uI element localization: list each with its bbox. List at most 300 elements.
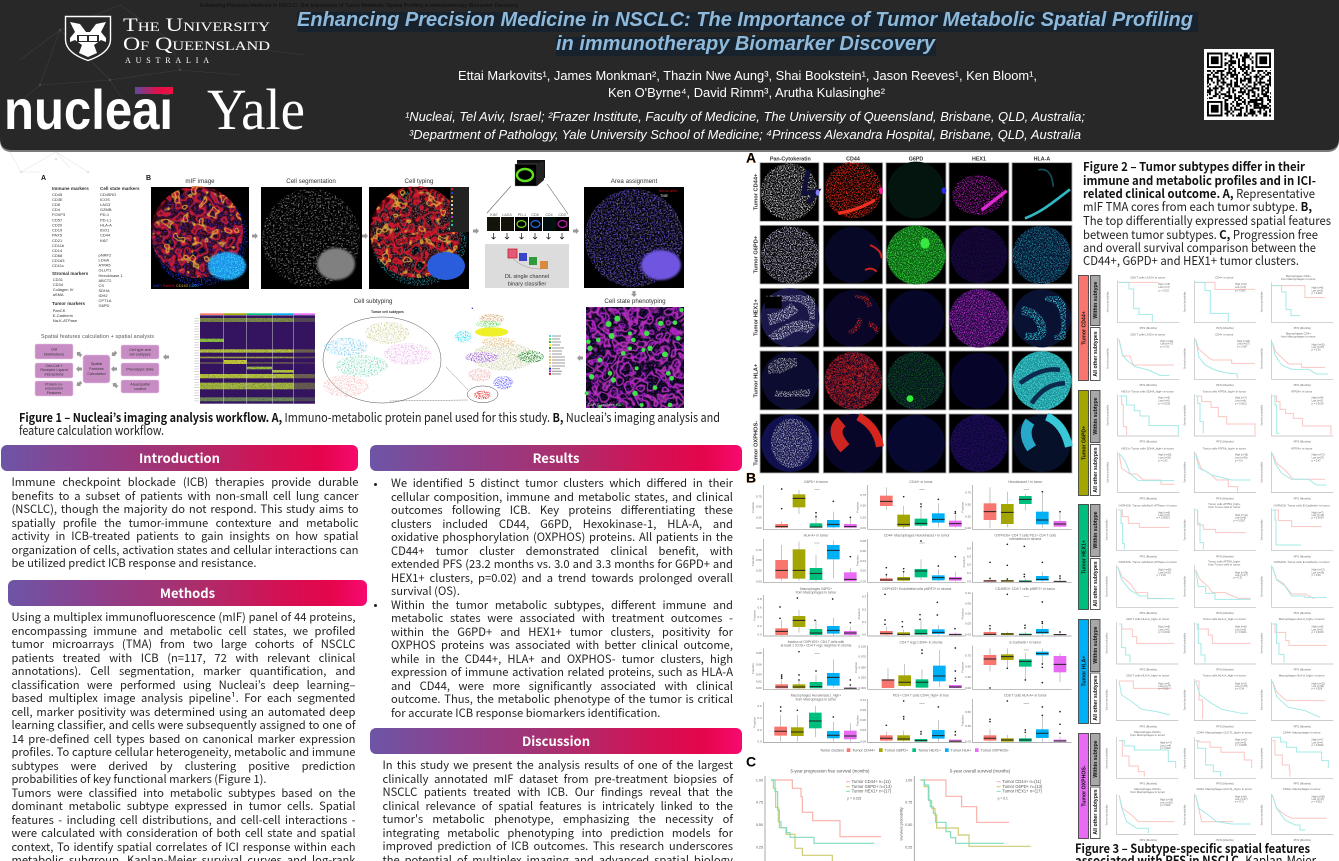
text: results: while in the CD44+, HLA+ and OXPHOS- tumor clusters, high [391,650,733,666]
km row 4: PFS (Months) [1216,497,1234,501]
text: methods: patients treated with ICB (n=117, 72 with relevant clinical [12,650,356,666]
figure 1 panel A: protein panel [41,175,140,323]
title: Enhancing Precision Medicine in NSCLC: The Importance of Tumor Metabolic Spatial Profiling [297,8,1193,31]
OS chart: 0.50 [905,823,912,827]
box: fraction of OXPHOS+ CD4 T cells: 0.08 [756,651,762,655]
figure 2 caption: between tumor subtypes. C, Progression free [1083,226,1318,243]
box: PD1+ CD4 T cells CD44 high: 0.00 [860,739,866,743]
box: OXPHOS+ CD4 T cell interactions: 0.2 [967,563,971,567]
km row 1: High (n=8) [1235,283,1247,286]
km row 7: Low (n=5) [1235,628,1246,631]
box: PD1+ CD4 T cells CD44 high: 0.12 [860,698,866,702]
figure 1 panel A: protein panel: CD19 [52,228,63,232]
km row 9: High (n=7) [1312,739,1323,742]
box: Hexokinase1+ in tumor: Fraction [960,502,964,513]
km row 2: Macrophages CD4+ [1286,332,1311,336]
box: fraction of OXPHOS+ CD4 T cells: 0.00 [756,686,762,690]
spatial features calculation diagram [35,334,169,396]
mIF image: DAPI PanCK CD163 CD20 [153,284,199,288]
km row 4: p = 0.6 [1235,459,1243,462]
km row 9: Low (n=5) [1235,741,1246,744]
km row 9: Macrophages CD44+ [1134,730,1161,734]
km row 2: Low (n=37) [1237,343,1250,346]
km row 4: ATP5A+ in tumor [1291,446,1312,450]
box: macrophages G6PD+: 0.4 [758,615,762,619]
text: results: for accurate ICB response biomarkers identification. [391,704,660,720]
km row 9: PFS (Months) [1140,781,1157,785]
spatial features calculation diagram: Receptor-Ligand [40,368,68,372]
km row 10: p = 0.71 [1235,801,1245,804]
km row 4: HEX1+ Tumor cells SDHA_high+ in tumor [1121,446,1174,450]
text: results: metabolic states were associated with treatment outcomes - [391,610,733,626]
km row 3: Survival probability [1183,404,1186,426]
cell subtyping title: Cell subtyping [354,298,393,305]
km row 4: PFS (Months) [1140,497,1157,501]
figure 2 panel A: tumor subtype TMA cores: HEX1 [972,156,986,162]
box: CD4 T regs CD44+: 0.025 [859,675,866,679]
text: methods: tumor microarrays (TMA) from two large cohorts of NSCLC [12,636,356,652]
km row 5: PFS (Months) [1140,554,1157,558]
spatial features calculation diagram: Features [89,367,104,371]
figure 1 panel A: protein panel: IDH2 [98,293,108,298]
heading: introduction [1,445,358,471]
box: CD45RO+ CD8: 0.09 [965,602,971,606]
box: Hexokinase1+ in tumor: 0.00 [965,526,971,530]
km row 5: High (n=7) [1312,511,1323,514]
km row 3: Low (n=6) [1235,399,1246,402]
bullet marker [374,483,376,486]
figure 1 panel A: protein panel: pNRF2 [98,252,112,258]
box plot legend: Tumor G6PD+ [885,748,908,752]
text: discussion: NSCLC patients treated with ICB. Our findings reveal that the [382,784,733,800]
km row 3: ATP5A+ in tumor [1291,389,1312,393]
km row 9: p = 0.009 [1160,747,1171,750]
box: CD4 T regs CD44+: Fraction [854,662,858,673]
figure 3 subtype labels: All other subtypes [1093,789,1099,835]
box: CD44+ in tumor: CD44+ in tumor [909,480,934,484]
box: HLA-A+ in tumor: 0.25 [756,568,762,572]
figure 1 panel A: protein panel: GLUT1 [98,268,112,273]
box: G6PD+ in tumor [751,480,860,530]
km row 5 [1106,502,1333,558]
box: CD8 T cells HLA-A+: 0.00 [965,739,971,743]
box: E-Cadherin+ in tumor: 0.25 [965,675,971,679]
km row 5: OXPHOS- Tumor cellsNa-K-ATPase+ in tumor [1119,503,1177,507]
figure 1 panel A: protein panel: ABCT2 [98,278,112,283]
figure 1 panel A: protein panel: Na-K-ATPase [53,318,78,323]
box: CD4 T regs CD44+ [854,640,966,690]
box: CD45RO+ CD8: 0.12 [965,591,971,595]
km row 2: PFS (Months) [1216,383,1234,387]
box: E-Cadherin+ in tumor: Fraction [960,662,964,673]
km row 1: Survival probability [1261,291,1264,312]
box: G6PD+ in tumor: G6PD+ in tumor [804,480,829,484]
box: fraction of OXPHOS+ CD4 T cells: 0.02 [756,680,762,684]
box: CD8 T cells HLA-A+ [960,694,1072,743]
box: E-Cadherin+ in tumor: 0.75 [965,654,971,658]
km row 5: Survival probability [1261,519,1264,540]
box: CD44+ in tumor: 0.00 [860,526,866,530]
km row 1: p < 0.001 [1158,289,1169,292]
km row 1 [1107,274,1333,330]
OS chart: 1.00 [905,778,912,782]
text: methods: dominant metabolic subtype expressed in tumor cells. Spatial [12,798,356,814]
box plot legend [820,748,1010,752]
km row 8: p = 0.085 [1158,688,1169,691]
text: discussion: improved prediction of ICB outcomes. This research underscores [382,838,733,854]
km row 3: Survival probability [1261,404,1264,426]
figure 3 subtype labels: Tumor HEX1+ [1082,540,1088,574]
figure 1 panel A: protein panel: Stromal markers [52,271,89,276]
box: OXPHOS+ CD4 T cell interactions: OXPHOS+ CD4 T cells PD1+ CD4 T cells [995,533,1056,537]
box: OXPHOS+ CD4 T cell interactions: 0.0 [967,579,971,583]
box: CD44- macrophages hexokinase1+: CD44- Macrophages Hexokinase1+ in tumor [884,534,950,538]
km row 8: Survival probability [1106,689,1109,710]
tumor cell subtypes magnified umap [323,310,468,403]
deep-learning classifier: CD3 [558,213,566,217]
km row 2: High (n=20) [1160,340,1174,343]
km row 7: Low (n=5) [1312,628,1323,631]
text: results: outcomes following ICB. Key proteins differentiating these [391,502,733,518]
box plot legend: Tumor CD44+ [852,748,875,752]
row HEX1+ [761,288,1071,348]
spatial features calculation diagram: Calculation [87,372,106,376]
box: CD4 T regs CD44+: 0.050 [859,665,866,669]
text: results: extended PFS (23.2 months vs. 3.0 and 3.3 months for G6PD+ and [391,556,733,572]
text: methods: were calculated with consideration of both cell state and spatial [12,825,356,841]
PFS chart: 0.25 [756,845,763,849]
figure 2 caption: and overall survival comparison between the [1083,239,1316,256]
km row 4: Tumor cells ATP5A_high+ in tumor [1203,446,1246,450]
text: results: CD44+ tumor cluster demonstrated clinical benefit, with [391,542,733,558]
box: CD44- macrophages hexokinase1+ [855,534,966,583]
km row 3: PFS (Months) [1140,440,1157,444]
spatial features calculation diagram: Spatial features calculation + spatial analysis [41,334,154,340]
text: methods: based multiplex image analysis pipeline¹. For each segmented [12,690,356,706]
box: Hexokinase1+ in tumor: Hexokinase1+ in tumor [1008,480,1043,484]
km row 3: Low (n=5) [1312,399,1323,402]
authors: Ettai Markovits¹, James Monkman², Thazin Nwe Aung³, Shai Bookstein¹, Jason Reeves¹, Ken Bloom¹, [458,68,1037,83]
box: CD44- macrophages hexokinase1+: 0.04 [860,559,866,563]
box: CD45RO+ CD8: 0.03 [965,622,971,626]
figure 2 panel A: tumor subtype TMA cores: G6PD [909,156,923,162]
km row 7: Low (n=5) [1158,628,1170,631]
box: Hexokinase1+ in tumor: 0.75 [965,490,971,494]
box: CD44+ in tumor: 0.25 [860,515,866,519]
arrow down [631,291,637,297]
box: OXPHOS+ endothelial: 0.2 [862,607,866,611]
figure 1 caption: feature calculation workflow. [19,421,164,439]
affiliations: ¹Nucleai, Tel Aviv, Israel; ²Frazer Institute, Faculty of Medicine, The University of Queensland, Brisbane, QLD, Australia; [405,109,1085,124]
cell state phenotyping [585,298,684,408]
box: OXPHOS+ CD4 T cell interactions: interactions in stroma [1009,537,1041,541]
figure 1 panel A: protein panel: CD4 [52,207,61,212]
box: Hexokinase1+ in tumor: 0.50 [965,502,971,506]
figure 2 caption: mIF TMA cores from each tumor subtype. B, [1083,198,1312,215]
figure 1 panel A: protein panel: E-Cadherin [53,313,73,318]
box: CD8 T cells HLA-A+: CD8 T cells HLA-A+ in tumor [1004,694,1048,698]
PFS chart [756,768,892,861]
logo: Yale: Yale [207,77,305,142]
logo: University of Queensland: AUSTRALIA [125,56,209,65]
text: methods: classification were performed using Nucleai’s deep learning– [12,676,356,692]
box: Hexokinase1+ in tumor: 0.25 [965,514,971,518]
OS chart: Tumor CD44+ n=(11) [1002,779,1042,784]
km row 8: High (n=32) [1312,682,1325,685]
km row 8: p = 0.34 [1235,688,1245,691]
km row 3: p = 0.0019 [1312,402,1324,405]
km row 3: p = 0.0012 [1235,402,1247,405]
km row 6 [1106,559,1333,615]
cell state phenotyping: Cell state phenotyping [604,298,666,305]
PFS chart: 0.50 [756,823,763,827]
box: CD44+ in tumor: 0.50 [860,504,866,508]
PFS chart: Tumor HEX1+ n=(17) [852,789,892,794]
figure 1 panel A: protein panel: PD-L1 [100,217,112,222]
affiliations [405,109,1085,142]
box: OXPHOS+ endothelial: 0.1 [862,620,866,624]
km row 4: PFS (Months) [1294,497,1311,501]
figure 2 caption [1083,158,1331,269]
figure 1 panel A: protein panel: CD8 [52,202,61,207]
km row 2: High (n=20) [1312,343,1325,346]
km row 1: Low (n=3) [1158,286,1170,289]
PFS chart: Tumor CD44+ n=(11) [852,779,891,784]
km row 4: High (n=18) [1235,454,1248,457]
row HLA+ [761,351,1071,410]
km row 10: p = 0.051 [1312,801,1323,804]
figure 1 panel A: protein panel: PD-1 [100,212,110,217]
km row 5: PFS (Months) [1216,554,1234,558]
km row 4: Low (n=36) [1235,456,1248,459]
text: methods: encompassing immune and metabolic cell states, we profiled [12,622,356,638]
text: methods: annotations). Cell segmentation, marker quantification, and [12,663,356,679]
km row 5: p = 0.0034 [1312,517,1324,520]
figure 3 subtype labels: Within subtype [1093,281,1099,319]
spatial features calculation diagram: Cell [51,348,57,352]
box: macrophages G6PD+: 0.6 [758,606,762,610]
km row 8: Tumor cells HLA-A_high+ in tumor [1203,674,1246,678]
arrow [252,233,258,239]
km row 7: High (n=8) [1158,626,1170,629]
km row 1: p = 0.004 [1312,292,1323,295]
box: CD45RO+ CD8: Fraction [960,608,964,619]
box: OXPHOS+ endothelial: 0.3 [862,595,866,599]
km row 2: PFS (Months) [1294,383,1311,387]
figure 2 panel A: tumor subtype TMA cores: Tumor HLA+ [753,363,759,397]
figure 3 caption: Figure 3 – Subtype-specific spatial features [1075,838,1310,857]
figure 1 panel A: protein panel: CD57 [52,217,63,222]
km row 6: High (n=27) [1312,569,1325,572]
box plot legend: Tumor OXPHOS- [981,748,1010,752]
km row 1: Low (n=3) [1312,289,1323,292]
km row 9: Survival probability [1106,747,1109,769]
deep-learning classifier: CD8 [531,213,539,217]
km row 5: from Tumor cells in tumor [1208,505,1240,509]
km row 10: p = 0.006 [1160,804,1171,807]
OS chart: 5-year overall survival (months) [950,768,1011,773]
spatial features calculation diagram: Distributions [44,352,64,356]
box: macrophages hexokinase1 high: 0.0 [758,739,762,743]
km row 4: p = 0.53 [1158,459,1168,462]
figure 1 panel A: protein panel: CD45RO [100,192,116,197]
km row 9: High (n=6) [1235,739,1247,742]
bullet marker [374,604,376,607]
cell typing [369,178,469,289]
box: CD44+ in tumor: Fraction [855,502,859,513]
km row 8: PFS (Months) [1216,724,1234,728]
deep-learning classifier [485,160,569,288]
figure 2 caption: related clinical outcome. A, Representative [1083,185,1315,202]
spatial features calculation diagram: expression [45,386,63,390]
km row 9: Survival probability [1261,747,1264,769]
arrow [577,355,583,361]
spatial features calculation diagram: Phenotypic state [126,368,154,372]
text: results: within the G6PD+ and HEX1+ tumor clusters, positivity for [391,624,733,640]
mIF image [151,178,249,289]
km row 10: Survival probability [1183,804,1186,825]
km row 7: PFS (Months) [1294,668,1311,672]
km row 4: Survival probability [1183,461,1186,483]
mIF image: mIF image [185,178,215,185]
box: HLA-A+ in tumor: 0.00 [756,579,762,583]
PFS chart: 5-year progression free survival (months) [791,768,870,773]
km row 9: Low (n=4) [1312,741,1323,744]
figure 1 panel A: protein panel: CD44 [100,232,111,238]
figure 2 panel A: tumor subtype TMA cores: Tumor CD44+ [753,173,759,210]
km row 1: CD4+ in tumor [1215,275,1234,279]
km row 1: PFS (Months) [1294,326,1311,330]
box: CD4 T regs CD44+: 0.075 [859,655,866,659]
km row 10 [1106,787,1333,842]
text: results: HEX1+ clusters, p=0.02) and a trend towards prolonged overall [391,570,733,586]
km row 6: High (n=38) [1235,571,1248,574]
km row 10: from Macrophages in tumor [1130,790,1165,794]
box: CD44- macrophages hexokinase1+: 0.06 [860,549,866,553]
OS chart: 0.25 [905,845,912,849]
box: macrophages hexokinase1 high: 0.4 [758,716,762,720]
box plot legend: Tumor clusters [820,748,844,752]
spatial features calculation diagram: Interactions [44,372,64,376]
arrow [362,233,368,239]
figure 2 panel B: box plots: B [746,470,756,486]
deep-learning classifier: KI67 [490,213,498,217]
box: E-Cadherin+ in tumor: 0.00 [965,686,971,690]
km row 1: Low (n=3) [1235,286,1246,289]
box: OXPHOS+ CD4 T cell interactions: 0.3 [967,554,971,558]
small file title: Enhancing Precision Medicine in NSCLC: The Importance of Tumor Metabolic Spatial Profiling in immunotherapy Biomarker Discovery [200,3,519,9]
box: CD44- macrophages hexokinase1+: 0.00 [860,579,866,583]
km row 10: Survival probability [1106,804,1109,825]
km row 7: Tumor cells HLA-A_high+ in tumor [1203,617,1246,621]
km row 2: Low (n=37) [1312,346,1324,349]
box: macrophages hexokinase1 high [753,694,860,743]
text: results: cellular composition, immune and metabolic states, and clinical [391,488,733,504]
km row 9: p = 0.0062 [1312,744,1324,747]
figure 1 panel A: protein panel: PAX5 [52,232,63,238]
km row 3: HEX1+ Tumor cells SDHA_high+ in tumor [1121,389,1174,393]
text: introduction: organization of cells, activation states and cellular interactions can [12,542,358,558]
km row 10: High (n=8) [1235,795,1247,798]
box: CD4 T regs CD44+: CD4 T regs CD44+ in stroma [900,640,943,644]
figure 1 panel A: protein panel: Tumor markers [52,301,86,306]
km row 2: p = 0.087 [1237,346,1248,349]
km row 4 [1107,446,1333,501]
figure 1 panel A: protein panel: CD45 [52,192,63,197]
text: introduction: benefits to a subset of patients with non-small cell lung cancer [12,488,358,504]
km row 8: Survival probability [1261,689,1264,710]
box: G6PD+ in tumor: 0.00 [756,526,762,530]
km row 8: High (n=3) [1235,682,1247,685]
km row 6: OXPHOS- Tumor cellsNa-K-ATPase+ in tumor [1119,560,1177,564]
figure 2 panel C: survival curves [746,754,1043,861]
km row 5: Low (n=10) [1312,514,1324,517]
figure 1 panel A: protein panel: ICOS [100,197,110,202]
box: CD8 T cells HLA-A+: 0.25 [965,724,971,728]
logo: University of Queensland: The University [123,15,271,36]
figure 1 panel A: protein panel: CD14 [52,248,63,253]
box: CD44+ in tumor [855,480,966,530]
km row 7: p = 0.0011 [1158,631,1171,634]
figure 1 panel A: protein panel: CD34 [53,282,64,287]
box: E-Cadherin+ in tumor: 0.50 [965,664,971,668]
area assignment: Area assignment [611,178,657,185]
figure 1 panel A: protein panel: A [41,175,46,182]
km row 10: High (n=38) [1160,799,1173,802]
text: results: oxidative phosphorylation (OXPHOS) proteins. All patients in the [391,529,733,545]
text: introduction: be utilized predict ICB response and resistance. [12,555,256,571]
figure 3 survival plots CD44+ and G6PD+ [1107,274,1333,501]
km row 2: Survival probability [1261,347,1264,369]
figure 1 panel A: protein panel: Immune markers [52,186,89,191]
km row 6: p = 0.93 [1157,574,1166,577]
box: E-Cadherin+ in tumor [960,640,1072,690]
row G6PD+ [761,226,1071,284]
figure 3 subtype labels: Within subtype [1093,740,1099,778]
text: results: We identified 5 distinct tumor clusters which differed in their [391,475,733,491]
OS chart [899,768,1043,861]
box: OXPHOS+ CD4 T cell interactions: 0.4 [967,546,971,550]
km row 9 [1106,730,1333,785]
figure 1 panel A: protein panel: CD11c [52,263,64,268]
figure 1 panel B label: B [146,175,151,182]
km row 7: PFS (Months) [1140,668,1157,672]
box: macrophages G6PD+: 0.0 [758,633,762,637]
box: CD8 T cells HLA-A+: Fraction [960,715,964,726]
box: fraction of OXPHOS+ CD4 T cells: Fraction [751,663,755,674]
km row 2: PFS (Months) [1140,383,1157,387]
box: PD1+ CD4 T cells CD44 high: 0.09 [860,708,866,712]
km row 2: p = 0.16 [1312,349,1321,352]
figure 3 survival plots HEX1+, HLA+ and OXPHOS- [1106,502,1333,842]
figure 2 caption: immune and metabolic profiles and in ICI- [1083,172,1316,189]
km row 3: High (n=5) [1158,397,1170,400]
km row 2: High (n=20) [1237,340,1250,343]
figure 2 panel A: tumor subtype TMA cores: HLA-A [1034,156,1050,162]
text: results: OXPHOS proteins was associated with better clinical outcome, [391,637,733,653]
km row 5: Low (n=6) [1235,517,1246,520]
km row 5: p = 0.0057 [1233,519,1246,522]
figure 2 caption: Figure 2 – Tumor subtypes differ in their [1083,158,1306,175]
km row 3: Survival probability [1107,404,1110,426]
box: macrophages G6PD+: Macrophages G6PD+ [800,587,832,591]
authors: Ken O'Byrne⁴, David Rimm³, Arutha Kulasinghe² [608,85,886,100]
umap of all cell types [455,308,565,403]
km row 5: PFS (Months) [1294,554,1311,558]
figure 2 panel A: tumor subtype TMA cores: Pan-Cytokeratin [770,156,811,162]
deep-learning classifier: DL single channel [505,274,549,280]
km row 5: Low (n=9) [1158,514,1170,517]
